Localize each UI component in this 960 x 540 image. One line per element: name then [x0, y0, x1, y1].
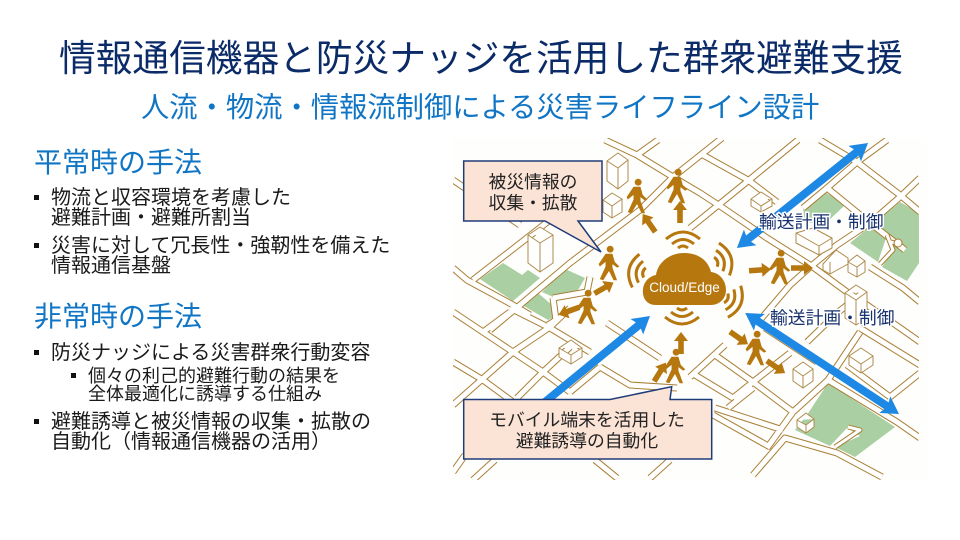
panel: emergency methods — [34, 301, 371, 453]
bullet: resilient infrastructure: 災害に対して冗長性・強靭性を備えた — [51, 235, 390, 257]
bullet: evacuation planning: 物流と収容環境を考慮した — [51, 187, 291, 209]
callout: mobile guidance: 避難誘導の自動化 — [516, 431, 658, 451]
callout: damage info: 被災情報の — [489, 172, 577, 192]
icon: evacuating people — [577, 169, 790, 383]
label: transport control upper: 輸送計画・制御 — [759, 212, 883, 232]
panel: normal-time methods — [34, 147, 390, 277]
callout: mobile guidance — [464, 387, 712, 459]
icon: movement arrows — [556, 201, 813, 385]
roads — [453, 138, 920, 480]
label: transport control lower: 輸送計画・制御 — [770, 308, 894, 328]
callout: damage info: 収集・拡散 — [489, 193, 578, 213]
icon: wireless signals — [626, 232, 747, 324]
bullet: automation: 自動化（情報通信機器の活用） — [51, 431, 331, 453]
heading: emergency: 非常時の手法 — [34, 301, 202, 332]
bullet: resilient infrastructure: 情報通信基盤 — [51, 255, 171, 277]
map background — [453, 138, 927, 480]
arrow: transport control lower — [740, 305, 904, 422]
bullet: evacuation planning: 避難計画・避難所割当 — [51, 207, 251, 229]
icon: cloud edge — [643, 253, 726, 305]
bullet: evacuation planning — [34, 187, 291, 229]
bullet: disaster nudges: 防災ナッジによる災害群衆行動変容 — [51, 342, 370, 364]
parks — [480, 192, 919, 457]
icon: cloud edge: Cloud/Edge — [649, 280, 720, 295]
buildings — [528, 153, 873, 433]
arrow: mobile link — [535, 308, 656, 412]
heading: normal-time: 平常時の手法 — [34, 147, 202, 178]
title: 情報通信機器と防災ナッジを活用した群衆避難支援 — [59, 38, 903, 79]
callout: mobile guidance: モバイル端末を活用した — [489, 410, 685, 430]
callout: damage info — [464, 161, 602, 252]
bullet: automation — [34, 411, 371, 453]
diagram: city map — [453, 138, 919, 480]
subtitle: 人流・物流・情報流制御による災害ライフライン設計 — [141, 91, 819, 123]
sub-bullet: individual optimum — [71, 366, 340, 404]
sub-bullet: individual optimum: 全体最適化に誘導する仕組み — [88, 384, 322, 404]
bullet: resilient infrastructure — [34, 235, 390, 277]
sub-bullet: individual optimum: 個々の利己的避難行動の結果を — [88, 366, 340, 386]
arrow: transport control upper — [731, 135, 874, 256]
bullet: automation: 避難誘導と被災情報の収集・拡散の — [51, 411, 371, 433]
